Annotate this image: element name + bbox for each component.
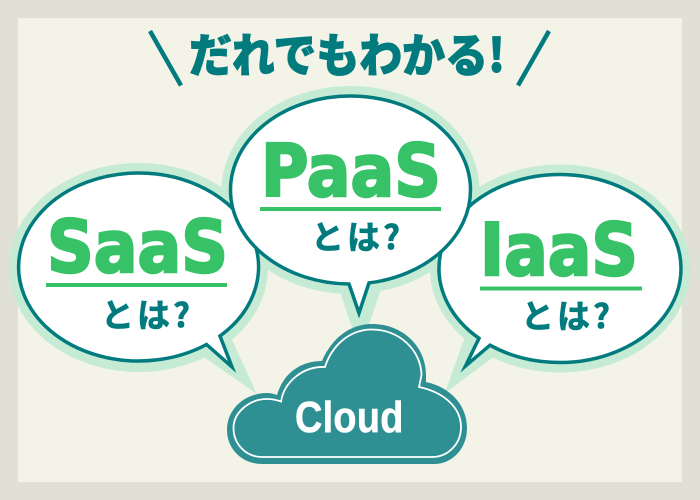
label: とは?: とは? — [311, 211, 400, 259]
speech bubble: IaaS — [439, 174, 681, 366]
label: IaaS: IaaS — [480, 208, 638, 292]
label: SaaS: SaaS — [47, 205, 228, 289]
speech bubble: SaaS — [19, 173, 259, 367]
speech bubble: PaaS — [231, 96, 470, 313]
label: PaaS: PaaS — [261, 129, 441, 213]
label: とは?: とは? — [521, 290, 610, 338]
title: だれでもわかる! — [189, 20, 505, 86]
bubble halos — [9, 86, 690, 394]
label: とは?: とは? — [101, 289, 190, 337]
icon: cloud — [227, 324, 467, 464]
label: Cloud: Cloud — [295, 392, 403, 442]
